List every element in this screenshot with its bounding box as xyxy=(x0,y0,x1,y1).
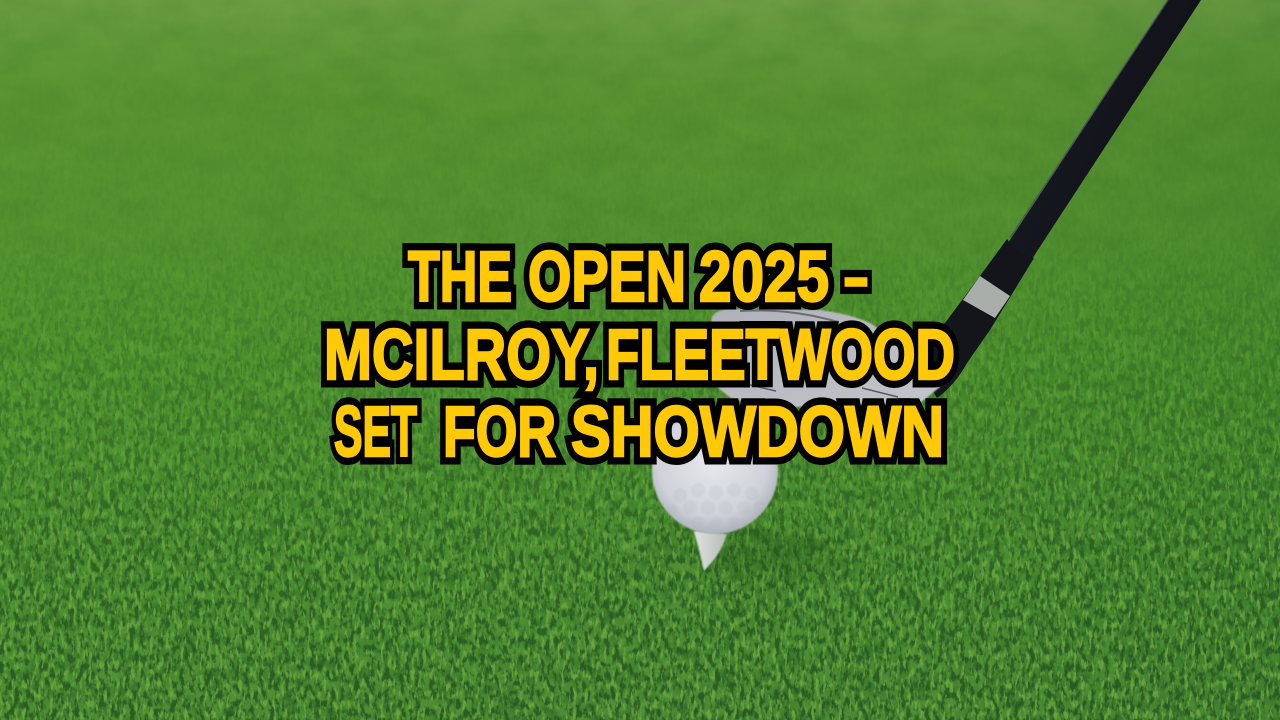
title fill: SHOWDOWN xyxy=(571,393,944,472)
title fill: – xyxy=(844,238,868,317)
club shaft xyxy=(1006,0,1201,262)
club hosel xyxy=(905,239,1034,398)
title fill xyxy=(324,238,955,472)
title fill: MCILROY, xyxy=(324,316,599,395)
title outline: OPEN xyxy=(528,238,686,317)
title outline: MCILROY, xyxy=(324,316,599,395)
title fill: 2025 xyxy=(699,238,829,317)
title fill: FLEETWOOD xyxy=(606,316,955,395)
icon: golf club xyxy=(711,0,1201,407)
club head xyxy=(711,309,945,407)
icon: golf ball xyxy=(652,408,778,534)
title fill: FOR xyxy=(443,393,556,472)
title fill: SET xyxy=(334,393,417,472)
title outline xyxy=(324,238,955,472)
title outline: FLEETWOOD xyxy=(606,316,955,395)
icon: golf tee xyxy=(694,531,727,571)
title outline: FOR xyxy=(443,393,556,472)
title fill: THE xyxy=(408,238,512,317)
title xyxy=(324,238,955,472)
shaft highlight xyxy=(1010,0,1168,238)
shadow under ball xyxy=(695,535,835,575)
title outline: SHOWDOWN xyxy=(571,393,944,472)
title outline: THE xyxy=(408,238,512,317)
silver band xyxy=(963,276,1010,318)
title outline: 2025 xyxy=(699,238,829,317)
title fill: OPEN xyxy=(528,238,686,317)
title outline: – xyxy=(844,238,868,317)
title outline: SET xyxy=(334,393,417,472)
